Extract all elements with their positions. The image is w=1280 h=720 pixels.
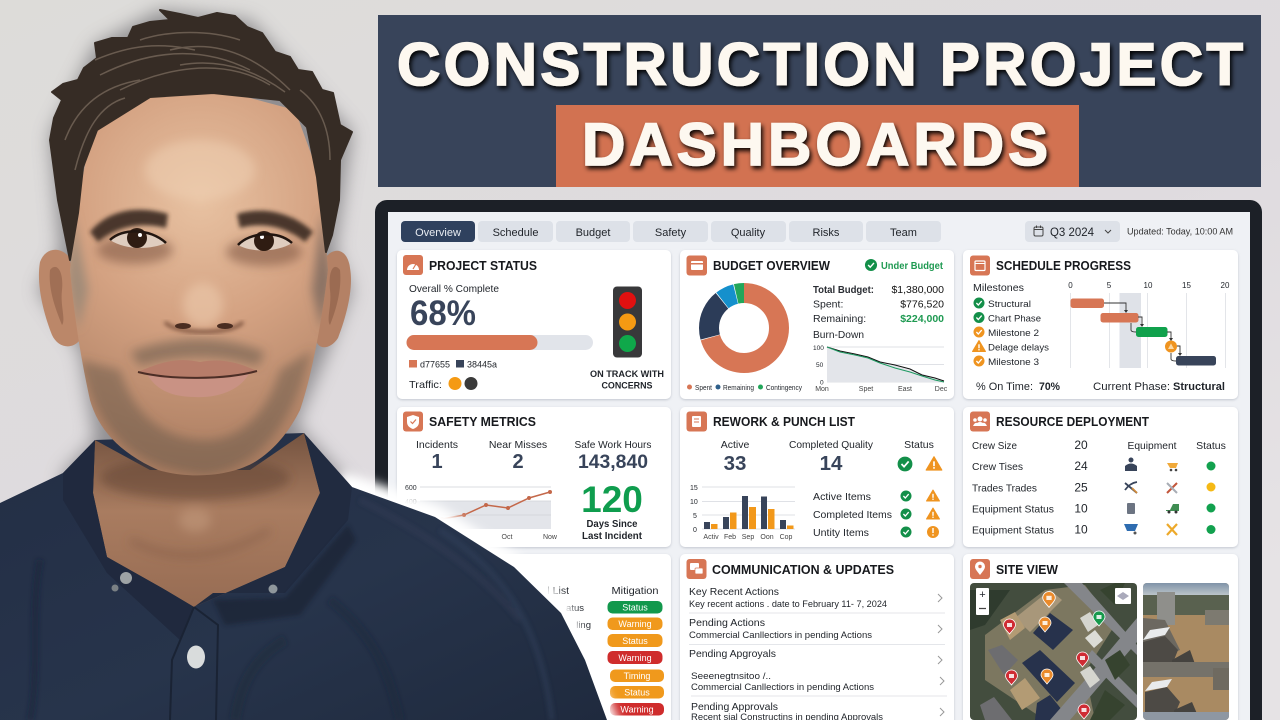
progress legend: d77655 — [420, 360, 450, 370]
milestone list: Chart Phase — [988, 314, 1041, 324]
date selector: Q3 2024 — [1050, 227, 1095, 239]
navigation tabs: Schedule — [493, 227, 538, 239]
map zoom control: + — [979, 589, 986, 601]
heading: REWORK & PUNCH LIST — [713, 414, 855, 429]
burn-down chart: 0 — [820, 380, 824, 386]
resource table: Equipment Status — [972, 524, 1054, 536]
burn-down chart: East — [898, 386, 912, 393]
days since last incident: Days Since — [586, 518, 638, 530]
collar left — [63, 440, 194, 640]
shirt placket — [170, 607, 218, 720]
burn-down chart: 100 — [813, 345, 824, 352]
bar chart: Feb — [724, 534, 736, 541]
navigation tabs: Overview — [415, 227, 461, 239]
navigation tabs: Risks — [813, 227, 840, 239]
donut chart — [709, 293, 779, 363]
map layers control — [1115, 588, 1131, 604]
line chart: Now — [543, 534, 558, 541]
milestone list: Milestones — [973, 282, 1024, 294]
bar chart: Sep — [742, 534, 754, 541]
bar chart: Oon — [760, 534, 774, 541]
burn-down chart — [813, 345, 948, 393]
near misses metric: 2 — [512, 451, 524, 473]
progress bar — [406, 335, 593, 350]
icon: gauge — [403, 255, 423, 275]
status pills — [608, 601, 664, 716]
days since last incident — [581, 479, 643, 542]
bar chart: 0 — [693, 527, 697, 534]
equipment icons — [1124, 458, 1179, 535]
navigation tabs: Team — [890, 227, 917, 239]
schedule footer: 70% — [1039, 381, 1060, 393]
progress legend — [409, 360, 497, 370]
budget figures: Burn-Down — [813, 329, 864, 341]
completed quality metric: 14 — [820, 452, 843, 475]
donut legend: Contingency — [766, 383, 802, 392]
date selector — [1025, 221, 1120, 242]
bar chart: Activ — [703, 534, 719, 541]
days since last incident: Last Incident — [582, 530, 642, 542]
icon: traffic light — [613, 286, 642, 358]
under budget badge: Under Budget — [881, 260, 943, 272]
bar chart: 5 — [693, 513, 697, 520]
line chart: 600 — [405, 485, 417, 492]
bar chart — [690, 485, 795, 541]
gantt chart: 15 — [1182, 281, 1191, 290]
under budget badge — [865, 259, 943, 272]
schedule footer — [976, 381, 1225, 393]
neck — [93, 433, 320, 607]
panel: site view — [963, 554, 1238, 720]
status pills: Status — [622, 636, 648, 646]
near misses metric — [489, 439, 547, 473]
active metric — [721, 439, 749, 475]
panel: risks and mitigation — [397, 554, 671, 720]
hair strands — [65, 32, 330, 170]
shoulder glow — [340, 487, 605, 720]
resource table: Trades Trades — [972, 482, 1037, 494]
monitor frame — [375, 200, 1262, 720]
shirt buttons — [112, 572, 278, 668]
mouth — [138, 360, 257, 397]
heading: BUDGET OVERVIEW — [713, 258, 831, 273]
heading: SCHEDULE PROGRESS — [996, 258, 1131, 273]
traffic legend: Traffic: — [409, 379, 442, 391]
line chart: 400 — [405, 499, 417, 506]
shirt — [0, 433, 607, 720]
updated timestamp: Updated: Today, 10:00 AM — [1127, 226, 1233, 236]
panel: communication and updates — [680, 554, 954, 720]
burn-down chart: Spet — [859, 386, 873, 393]
line chart: Oct — [502, 534, 512, 541]
schedule footer: Current Phase: — [1093, 381, 1170, 393]
panel: safety metrics — [397, 407, 671, 547]
panel: resource deployment — [963, 407, 1238, 547]
site photo — [1143, 583, 1229, 720]
resource table: Crew Size — [972, 440, 1017, 452]
title banner — [378, 15, 1261, 187]
burn-down chart: Dec — [935, 386, 948, 393]
item status list: Completed Items — [813, 509, 892, 521]
map pins — [1004, 592, 1105, 719]
update: pending actions: Pending Actions — [689, 617, 765, 629]
safe work hours metric: 143,840 — [578, 451, 648, 473]
completed quality metric — [789, 439, 874, 475]
status metric — [898, 439, 942, 471]
face — [70, 88, 328, 475]
right ear — [316, 251, 351, 347]
hair — [50, 10, 352, 260]
left ear — [39, 250, 80, 346]
map zoom control — [976, 588, 989, 615]
resource table: Equipment Status — [972, 504, 1054, 516]
icon: team — [970, 412, 990, 432]
status pills: Warning — [618, 653, 652, 663]
budget figures: Total Budget: — [813, 284, 874, 296]
safe work hours metric — [574, 439, 652, 473]
resource table: 24 — [1074, 459, 1088, 473]
update: seen notes: Commercial Canllectiors in pending Actions — [691, 682, 874, 693]
budget figures: Spent: — [813, 298, 843, 310]
eye right — [238, 231, 292, 251]
heading: COMMUNICATION & UPDATES — [712, 562, 894, 577]
incidents metric: Incidents — [416, 439, 458, 451]
mitigation column header: Mitigation — [612, 585, 659, 597]
percent value: 68% — [410, 294, 476, 333]
resource table — [972, 438, 1226, 536]
aerial map — [970, 583, 1137, 720]
completed quality metric: Completed Quality — [789, 439, 874, 451]
update: seen notes: Seeenegtnsitoo /.. — [691, 671, 771, 682]
icon: location pin — [970, 559, 990, 579]
panel: budget overview — [680, 250, 954, 399]
gantt chart — [1068, 281, 1230, 368]
bar chart: 15 — [690, 485, 698, 492]
update: seen notes — [691, 671, 944, 693]
navigation tabs — [401, 221, 941, 242]
overall complete label: Overall % Complete — [409, 283, 499, 295]
budget figures: Remaining: — [813, 313, 866, 325]
update: pending actions: Commercial Canllectiors in pending Actions — [689, 630, 872, 641]
navigation tabs: Safety — [655, 227, 687, 239]
budget figures — [813, 284, 944, 341]
gantt chart: 20 — [1221, 281, 1230, 290]
eyebrows — [90, 210, 313, 242]
resource table: 10 — [1074, 522, 1088, 536]
bar chart: Cop — [780, 534, 793, 541]
budget figures: $1,380,000 — [891, 284, 944, 296]
status label: CONCERNS — [602, 380, 652, 392]
update: pending actions — [689, 617, 942, 641]
risk list column: atus — [566, 603, 584, 614]
incidents metric: 1 — [431, 451, 443, 473]
title line 1: CONSTRUCTION PROJECT — [397, 31, 1243, 98]
milestone list: Delage delays — [988, 342, 1049, 354]
status label: ON TRACK WITH — [590, 369, 664, 380]
resource table: 25 — [1074, 480, 1088, 494]
heading: PROJECT STATUS — [429, 258, 537, 273]
icon: calendar — [970, 256, 990, 276]
schedule footer: Structural — [1173, 381, 1225, 393]
risk list column: l List — [547, 585, 569, 597]
burn-down chart: 50 — [816, 362, 824, 369]
update: pending approvals repeat — [691, 701, 944, 720]
resource table: Crew Tises — [972, 461, 1023, 473]
title highlight block — [556, 105, 1079, 187]
collar shadow — [213, 525, 356, 625]
collar right — [194, 433, 352, 607]
update: pending approvals repeat: Pending Approvals — [691, 701, 778, 713]
head shadow — [38, 10, 352, 560]
donut legend — [687, 383, 802, 392]
update: pending approvals — [689, 648, 942, 664]
milestone list: Milestone 3 — [988, 357, 1039, 368]
schedule footer: % On Time: — [976, 381, 1033, 393]
update: pending approvals: Pending Apgroyals — [689, 648, 776, 660]
active metric: Active — [721, 439, 749, 451]
donut legend: Remaining — [723, 383, 754, 392]
shirt folds — [30, 500, 552, 720]
icon: shield — [403, 412, 423, 432]
item status list — [813, 490, 940, 539]
days since last incident: 120 — [581, 479, 643, 520]
milestone list — [972, 282, 1049, 368]
heading: SITE VIEW — [996, 562, 1059, 577]
heading: SAFETY METRICS — [429, 414, 536, 429]
icon: clipboard — [686, 412, 707, 432]
budget figures: $224,000 — [900, 313, 944, 325]
burn-down chart: Mon — [815, 386, 829, 393]
heading: RESOURCE DEPLOYMENT — [996, 414, 1149, 429]
status pills: Warning — [620, 704, 654, 714]
milestone list: Milestone 2 — [988, 328, 1039, 339]
gantt chart: 5 — [1107, 281, 1112, 290]
status pills: Status — [622, 602, 648, 612]
resource table: 20 — [1074, 438, 1088, 452]
progress legend: 38445a — [467, 360, 497, 370]
incidents metric — [416, 439, 458, 473]
item status list: Active Items — [813, 491, 871, 503]
status pills: Timing — [624, 671, 650, 681]
line chart — [405, 485, 558, 541]
status pills: Warning — [618, 619, 652, 629]
budget figures: $776,520 — [900, 298, 944, 310]
nose — [165, 322, 243, 332]
eye left — [110, 228, 166, 248]
resource table: Equipment — [1128, 440, 1177, 452]
update: key recent actions — [689, 586, 942, 610]
panel: schedule progress — [963, 250, 1238, 399]
risk list column: ling — [576, 620, 591, 631]
active metric: 33 — [724, 452, 746, 475]
status metric: Status — [904, 439, 934, 451]
near misses metric: Near Misses — [489, 439, 547, 451]
resource table: Status — [1196, 440, 1226, 452]
traffic legend — [409, 377, 478, 391]
navigation tabs: Budget — [576, 227, 610, 239]
icon: chat — [686, 559, 706, 579]
status pills: Status — [624, 688, 650, 698]
dashboard screen — [388, 212, 1250, 720]
facial shading — [68, 140, 332, 475]
status dots — [1206, 462, 1216, 534]
gantt chart: 10 — [1144, 281, 1153, 290]
safe work hours metric: Safe Work Hours — [574, 439, 652, 451]
risk list column — [547, 585, 591, 631]
status label — [590, 369, 664, 392]
panel: rework and punch list — [680, 407, 954, 547]
navigation tabs: Quality — [731, 227, 766, 239]
person cutout — [0, 10, 607, 720]
gantt chart: 0 — [1068, 281, 1073, 290]
donut legend: Spent — [695, 383, 713, 392]
update: key recent actions: Key Recent Actions — [689, 586, 779, 598]
milestone list: Structural — [988, 299, 1031, 310]
icon: card — [686, 256, 707, 276]
resource table: 10 — [1074, 502, 1088, 516]
panel: project status — [397, 250, 671, 399]
bar chart: 10 — [690, 499, 698, 506]
title line 2: DASHBOARDS — [582, 111, 1048, 178]
item status list: Untity Items — [813, 527, 869, 539]
update: key recent actions: Key recent actions . date to February 11- 7, 2024 — [689, 599, 887, 610]
neck shading — [100, 456, 290, 555]
